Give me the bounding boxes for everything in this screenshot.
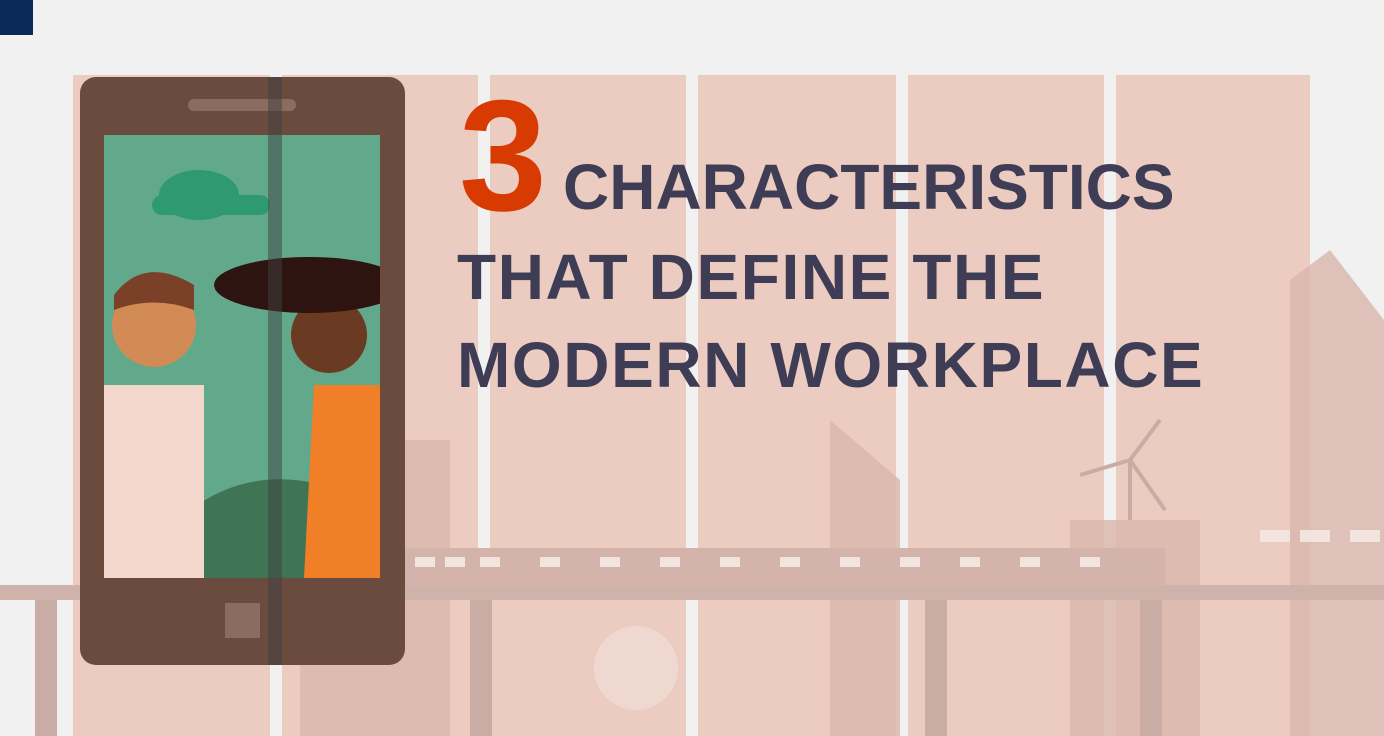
home button	[225, 603, 260, 638]
screen	[104, 135, 380, 578]
corner mark	[0, 0, 33, 35]
speaker	[188, 99, 296, 111]
title	[457, 68, 1204, 401]
number 3: 3	[459, 68, 547, 244]
phone with two people	[80, 77, 405, 665]
title line 1: CHARACTERISTICS	[563, 151, 1175, 223]
vertical band	[268, 77, 282, 665]
title line 2: THAT DEFINE THE	[457, 241, 1045, 313]
title line 3: MODERN WORKPLACE	[457, 329, 1204, 401]
